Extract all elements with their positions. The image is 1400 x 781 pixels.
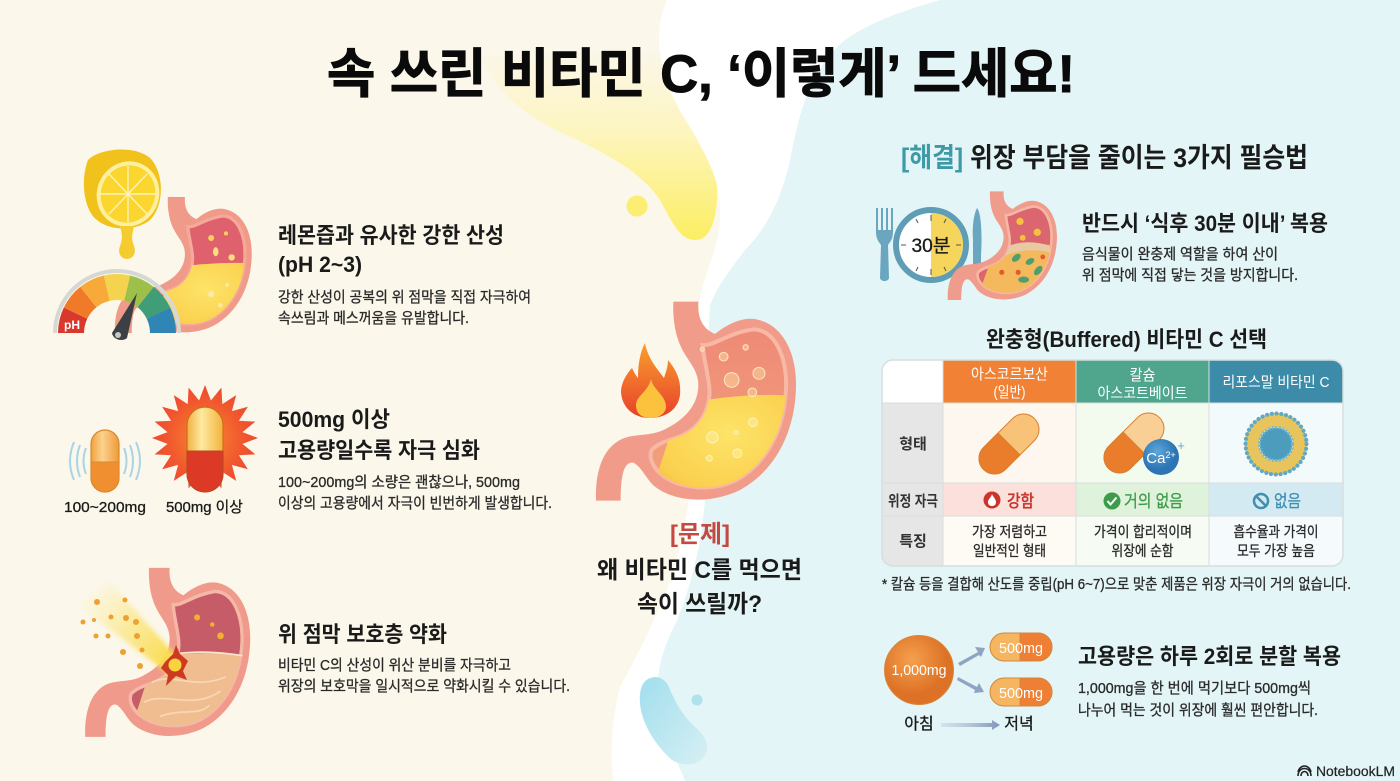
label: morning: 아침 xyxy=(904,715,934,733)
icon: calcium capsule: 2+ xyxy=(1165,450,1176,460)
icon: 500mg capsule top xyxy=(990,633,1052,661)
icon: calcium capsule: Ca xyxy=(1146,450,1165,467)
icon: clock xyxy=(896,210,966,280)
icon: stomach with acid xyxy=(115,197,252,337)
icon: calcium capsule xyxy=(1098,407,1185,479)
heading line 2: 고용량일수록 자극 심화 xyxy=(278,438,480,463)
icon: calcium capsule: + xyxy=(1177,438,1185,453)
heading: question line 1: 왜 비타민 C를 먹으면 xyxy=(597,557,802,584)
heading: question line 2: 속이 쓰릴까? xyxy=(637,591,762,618)
text line 2: 나누어 먹는 것이 위장에 훨씬 편안합니다. xyxy=(1078,702,1318,719)
title: 속 쓰린 비타민 C, ‘이렇게’ 드세요! xyxy=(327,45,1075,104)
label: 500mg 이상 xyxy=(166,499,243,516)
feature: ascorbic line 2: 일반적인 형태 xyxy=(973,543,1046,560)
icon: 500mg capsule bottom: 500mg xyxy=(999,685,1043,702)
panel: cause 2 dose xyxy=(64,385,552,516)
table: vitamin C comparison xyxy=(882,360,1343,566)
label: 100~200mg xyxy=(64,499,146,516)
feature: ascorbic line 1: 가장 저렴하고 xyxy=(972,524,1047,541)
rating: almost none xyxy=(1104,492,1183,511)
icon: 1000mg ball: 1,000mg xyxy=(892,662,946,679)
column header: ascorbic acid: 아스코르보산 xyxy=(971,366,1048,383)
column header note: (일반) xyxy=(994,384,1026,401)
heading: 고용량은 하루 2회로 분할 복용 xyxy=(1078,644,1341,669)
rating: almost none: 거의 없음 xyxy=(1124,492,1183,511)
feature: liposomal line 1: 흡수율과 가격이 xyxy=(1234,524,1318,541)
icon: acid beam xyxy=(78,582,188,686)
heading: solution: [해결] 위장 부담을 줄이는 3가지 필승법 xyxy=(901,143,1308,173)
panel: solution 1 timing xyxy=(876,191,1328,303)
row label: irritation: 위정 자극 xyxy=(888,493,938,510)
text line 2: 이상의 고용량에서 자극이 빈번하게 발생합니다. xyxy=(278,495,552,512)
column header: calcium: 칼슘 xyxy=(1130,367,1156,384)
footnote: * 칼슘 등을 결합해 산도를 중립(pH 6~7)으로 맞춘 제품은 위장 자극이 거의 없습니다. xyxy=(882,576,1351,593)
icon: capsule xyxy=(973,408,1045,480)
icon: lemon xyxy=(84,150,170,259)
icon: pH gauge: pH xyxy=(64,318,80,332)
heading: 레몬즙과 유사한 강한 산성 xyxy=(278,223,504,248)
icon: 1000mg ball xyxy=(884,636,954,704)
panel: problem centre xyxy=(596,302,802,618)
feature: liposomal line 2: 모두 가장 높음 xyxy=(1237,543,1315,560)
icon: liposome xyxy=(1246,414,1306,474)
icon: 500mg capsule bottom xyxy=(990,678,1052,706)
row label: form: 형태 xyxy=(899,436,927,453)
heading: 위 점막 보호층 약화 xyxy=(278,622,447,647)
heading: 500mg 이상 xyxy=(278,407,390,432)
rating: strong: 강함 xyxy=(1007,492,1034,511)
icon: flame xyxy=(621,343,680,418)
logo: NotebookLM: NotebookLM xyxy=(1316,764,1395,779)
icon: 500mg capsule top: 500mg xyxy=(999,640,1043,657)
rating: strong xyxy=(984,492,1034,511)
column header: ascorbate: 아스코트베이트 xyxy=(1098,385,1188,402)
text line 2: 위장의 보호막을 일시적으로 약화시킬 수 있습니다. xyxy=(278,678,570,695)
arrow: to first dose xyxy=(958,647,985,666)
rating: none: 없음 xyxy=(1274,492,1301,511)
icon: clock: 30분 xyxy=(912,236,950,257)
icon: stomach with food xyxy=(948,191,1057,303)
row label: features: 특징 xyxy=(899,533,927,550)
text line 2: 위 점막에 직접 닿는 것을 방지합니다. xyxy=(1082,267,1298,284)
text: 강한 산성이 공복의 위 점막을 직접 자극하여 xyxy=(278,289,531,306)
panel: cause 3 mucosa xyxy=(78,568,570,742)
icon: inner flame xyxy=(636,379,666,418)
panel: cause 1 acidity xyxy=(55,150,531,340)
column header: liposomal: 리포스말 비타민 C xyxy=(1222,374,1330,391)
text: 1,000mg을 한 번에 먹기보다 500mg씩 xyxy=(1078,680,1311,697)
icon: stomach with damaged lining xyxy=(85,568,251,742)
text: 음식물이 완충제 역할을 하여 산이 xyxy=(1082,246,1278,263)
text: 비타민 C의 산성이 위산 분비를 자극하고 xyxy=(278,657,511,674)
text line 2: 속쓰림과 메스꺼움을 유발합니다. xyxy=(278,310,469,327)
icon: fork xyxy=(876,208,893,281)
arrow: to second dose xyxy=(957,677,984,693)
label: evening: 저녁 xyxy=(1004,715,1034,733)
heading line 2: (pH 2~3) xyxy=(278,252,362,277)
icon: burst capsule xyxy=(152,385,258,492)
rating: none xyxy=(1254,492,1301,511)
arrow: morning to evening xyxy=(941,720,1000,730)
icon: small capsule xyxy=(70,430,140,492)
panel: solution 3 split dose xyxy=(884,633,1341,733)
feature: calcium line 2: 위장에 순함 xyxy=(1112,543,1174,560)
heading: buffered: 완충형(Buffered) 비타민 C 선택 xyxy=(986,327,1267,352)
icon: knife xyxy=(973,208,982,268)
icon: central stomach xyxy=(596,302,797,507)
icon: pH gauge xyxy=(55,271,179,340)
heading: 반드시 ‘식후 30분 이내’ 복용 xyxy=(1082,211,1328,236)
feature: calcium line 1: 가격이 합리적이며 xyxy=(1094,524,1192,541)
text: 100~200mg의 소량은 괜찮으나, 500mg xyxy=(278,474,520,491)
heading: problem label: [문제] xyxy=(670,521,730,548)
